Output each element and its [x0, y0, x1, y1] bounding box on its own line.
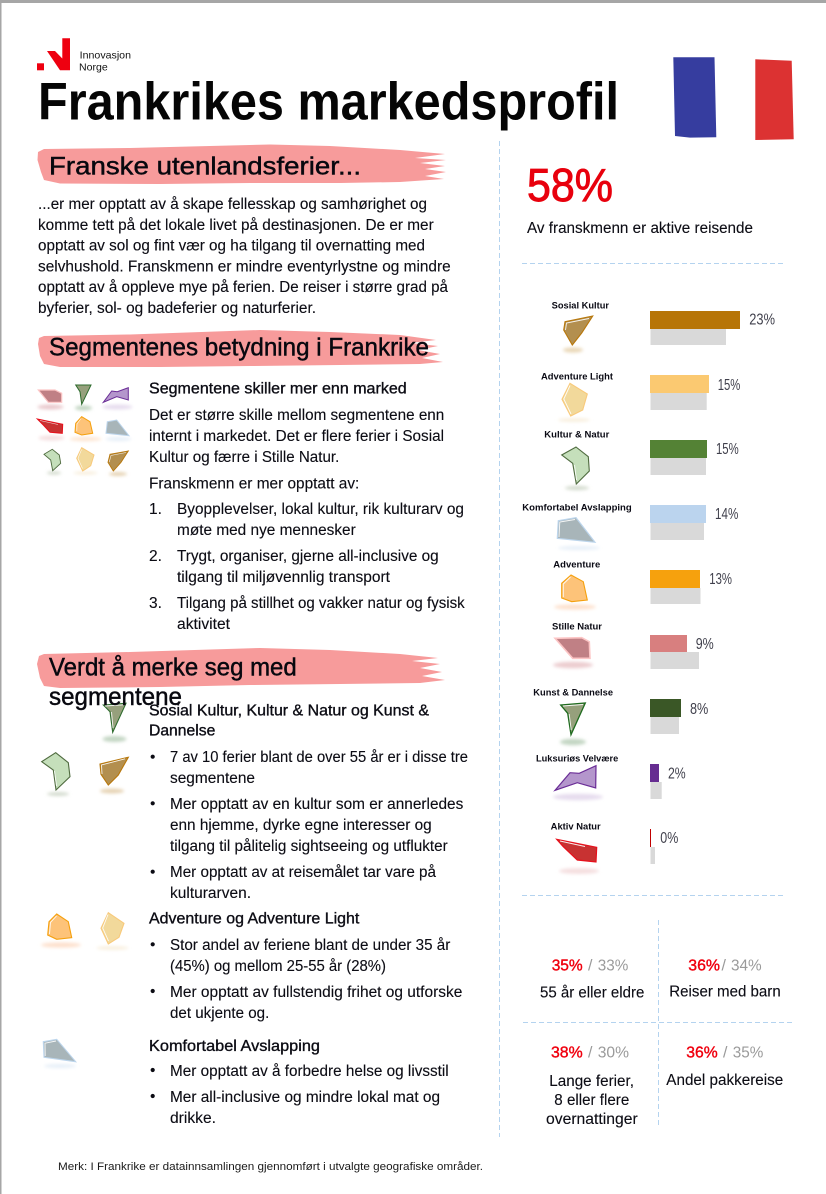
text block: segmentene skiller: 2.	[149, 548, 162, 565]
text block: Adventure og Adventure Light: (45%) og mellom 25-55 år (28%)	[170, 958, 386, 975]
icon: French flag	[673, 57, 794, 140]
text block: segmentene skiller: møte med nye mennesker	[177, 522, 356, 539]
stat: Andel pakkereise: Andel pakkereise	[666, 1072, 783, 1089]
text block: segmentene skiller: 3.	[149, 595, 162, 612]
text block: Sosial Kultur, Kultur og Natur og Kunst og Dannelse	[149, 702, 468, 902]
segment row: Stille Natur: 9%	[696, 636, 714, 653]
text block: segmentene skiller: Trygt, organiser, gjerne all-inclusive og	[177, 548, 439, 565]
stat: Lange ferier: 8 eller flere	[554, 1092, 629, 1109]
segment row: Adventure: 13%	[709, 571, 732, 588]
segment row: Adventure Light: Adventure Light	[541, 372, 613, 382]
segment row: Adventure	[553, 560, 732, 610]
text block: segmentene skiller: Byopplevelser, lokal kultur, rik kulturarv og	[177, 501, 464, 518]
segment row: Kunst og Dannelse: 8%	[690, 701, 708, 718]
segment row: Kunst og Dannelse	[533, 688, 708, 745]
segment row: Kultur og Natur: 15%	[716, 441, 739, 458]
text block: Sosial Kultur, Kultur og Natur og Kunst og Dannelse: enn hjemme, dyrke egne interesser og	[170, 817, 432, 834]
segment row: Adventure: Adventure	[553, 560, 600, 570]
stat: 58 percent active travellers	[527, 159, 753, 237]
stat: Lange ferier: 38%	[551, 1045, 583, 1062]
text block: Komfortabel Avslapping: Komfortabel Avslapping	[149, 1038, 320, 1055]
segment row: Adventure Light	[541, 372, 740, 422]
icon: Komfortabel Avslapping	[43, 1039, 76, 1068]
stat: Lange ferier: overnattinger	[546, 1111, 638, 1128]
text block: Komfortabel Avslapping: Mer all-inclusive og mindre lokal mat og	[170, 1089, 440, 1106]
stat: 55 år eller eldre: 35%	[552, 958, 583, 975]
text block: Komfortabel Avslapping: drikke.	[170, 1110, 216, 1127]
stat: Reiser med barn: /	[722, 958, 726, 975]
segment row: Kunst og Dannelse: Kunst & Dannelse	[533, 688, 613, 698]
heading: Franske utenlandsferier	[38, 144, 446, 184]
text block: segmentene skiller: aktivitet	[177, 616, 231, 633]
text block: segmentene skiller: Kultur og færre i Stille Natur.	[149, 449, 339, 466]
text block: Sosial Kultur, Kultur og Natur og Kunst og Dannelse: Mer opptatt av en kultur som er annerledes	[170, 796, 464, 813]
text block: Sosial Kultur, Kultur og Natur og Kunst og Dannelse: Dannelse	[149, 723, 215, 740]
segment row: Sosial Kultur: Sosial Kultur	[552, 301, 610, 311]
text block: segmentene skiller: Segmentene skiller mer enn marked	[149, 381, 407, 398]
stat: 55 år eller eldre: /	[588, 958, 593, 975]
stat: Andel pakkereise: 36%	[686, 1045, 718, 1062]
segment row: Aktiv Natur: 0%	[660, 830, 678, 847]
stat: 58 percent active travellers: 58%	[527, 159, 613, 211]
segment row: Stille Natur	[552, 622, 714, 669]
text block: segmentene skiller: 1.	[149, 501, 162, 518]
stat: Andel pakkereise: /	[723, 1045, 728, 1062]
text block: Adventure og Adventure Light: Stor andel av feriene blant de under 35 år	[170, 937, 450, 954]
text block: Sosial Kultur, Kultur og Natur og Kunst og Dannelse: Sosial Kultur, Kultur & Natur og Kunst &	[149, 702, 430, 719]
segment row: Aktiv Natur	[551, 822, 678, 874]
stat: 55 år eller eldre	[540, 958, 644, 1001]
stat grid: traveller characteristics	[540, 958, 783, 1128]
text block: segmentene skiller: Tilgang på stillhet og vakker natur og fysisk	[177, 595, 465, 612]
stat: 55 år eller eldre: 33%	[598, 958, 628, 975]
text block: segmentene skiller: internt i markedet. Det er flere ferier i Sosial	[149, 428, 444, 445]
text block: Sosial Kultur, Kultur og Natur og Kunst og Dannelse: 7 av 10 ferier blant de over 55 år er i disse tre	[170, 749, 468, 766]
title: Frankrikes markedsprofil	[38, 72, 619, 132]
stat: Reiser med barn	[669, 958, 781, 1001]
segment row: Komfortabel Avslapping: 14%	[715, 506, 738, 523]
stat: Reiser med barn: 36%	[688, 958, 720, 975]
segment row: Adventure Light: 15%	[718, 377, 740, 394]
stat: Lange ferier: 30%	[598, 1045, 629, 1062]
logo: Innovasjon Norge	[37, 38, 131, 73]
text block: Adventure og Adventure Light: Adventure og Adventure Light	[149, 911, 360, 928]
text block: Sosial Kultur, Kultur og Natur og Kunst og Dannelse: segmentene	[170, 770, 255, 787]
stat: Reiser med barn: 34%	[731, 958, 762, 975]
segment row: Komfortabel Avslapping	[522, 503, 738, 550]
text block: Adventure og Adventure Light: Mer opptatt av fullstendig frihet og utforske	[170, 984, 462, 1001]
bar chart: segments	[522, 301, 775, 874]
segment row: Luksuriøs Velvære	[536, 754, 686, 800]
stat: Andel pakkereise: 35%	[733, 1045, 763, 1062]
segment row: Komfortabel Avslapping: Komfortabel Avslapping	[522, 503, 632, 513]
segment row: Luksuriøs Velvære: 2%	[668, 765, 686, 782]
stat: 58 percent active travellers: Av franskmenn er aktive reisende	[527, 220, 753, 237]
stat: 55 år eller eldre: 55 år eller eldre	[540, 984, 644, 1001]
icon group: Adventure and Adventure Light	[41, 913, 128, 950]
icon group: nine segment radar shapes	[37, 385, 132, 476]
stat: Reiser med barn: Reiser med barn	[669, 984, 781, 1001]
text block: segmentene skiller: Det er større skille mellom segmentene enn	[149, 407, 444, 424]
text block: Komfortabel Avslapping	[149, 1038, 449, 1127]
text block: intro: opptatt av sol og fint vær og ha tilgang til overnatting med	[38, 238, 425, 255]
text block: segmentene skiller: tilgang til miljøvennlig transport	[177, 569, 391, 586]
text block: Adventure og Adventure Light: det ukjente og.	[170, 1005, 269, 1022]
stat: Lange ferier: Lange ferier,	[549, 1073, 634, 1090]
segment row: Stille Natur: Stille Natur	[552, 622, 603, 632]
heading continuation: segmentene: segmentene	[49, 683, 182, 711]
text block: segmentene skiller: Franskmenn er mer opptatt av:	[149, 475, 359, 492]
text block: intro: komme tett på det lokale livet på destinasjonen. De er mer	[38, 217, 434, 234]
segment row: Sosial Kultur: 23%	[749, 312, 775, 329]
segment row: Kultur og Natur	[544, 430, 739, 490]
heading: Verdt å merke seg med segmentene: Verdt å merke seg med	[49, 654, 297, 682]
segment row: Luksuriøs Velvære: Luksuriøs Velvære	[536, 754, 618, 764]
text block: intro: selvhushold. Franskmenn er mindre eventyrlystne og mindre	[38, 258, 451, 275]
text block: Komfortabel Avslapping: Mer opptatt av å forbedre helse og livsstil	[170, 1063, 449, 1080]
logo: Innovasjon Norge: Innovasjon	[80, 49, 131, 61]
logo: Innovasjon Norge: Norge	[79, 61, 108, 73]
stat: Lange ferier	[546, 1045, 638, 1128]
text block: intro: byferier, sol- og badeferier og naturferier.	[38, 300, 316, 317]
text block: intro	[38, 196, 451, 317]
heading: Segmentenes betydning: Segmentenes betydning i Frankrike	[49, 334, 429, 362]
text block: Sosial Kultur, Kultur og Natur og Kunst og Dannelse: kulturarven.	[170, 885, 251, 902]
footnote: Merk: I Frankrike er datainnsamlingen gjennomført i utvalgte geografiske områder.	[58, 1161, 483, 1173]
text block: intro: opptatt av å oppleve mye på ferien. De reiser i større grad på	[38, 279, 448, 296]
text block: Sosial Kultur, Kultur og Natur og Kunst og Dannelse: tilgang til pålitelig sightseeing og utflukter	[170, 838, 448, 855]
stat: Andel pakkereise	[666, 1045, 783, 1089]
segment row: Kultur og Natur: Kultur & Natur	[544, 430, 610, 440]
stat: Lange ferier: /	[588, 1045, 593, 1062]
heading: Verdt å merke seg med segmentene	[37, 648, 445, 688]
text block: segmentene skiller	[149, 381, 465, 633]
icon group: Sosial Kultur, Kultur og Natur, Kunst og Dannelse	[42, 703, 128, 796]
heading: Franske utenlandsferier: Franske utenlandsferier...	[49, 152, 361, 180]
segment row: Aktiv Natur: Aktiv Natur	[551, 822, 601, 832]
text block: Adventure og Adventure Light	[149, 911, 462, 1022]
text block: Sosial Kultur, Kultur og Natur og Kunst og Dannelse: Mer opptatt av at reisemålet tar vare på	[170, 864, 436, 881]
segment row: Sosial Kultur	[552, 301, 775, 353]
text block: intro: ...er mer opptatt av å skape fellesskap og samhørighet og	[38, 196, 427, 213]
